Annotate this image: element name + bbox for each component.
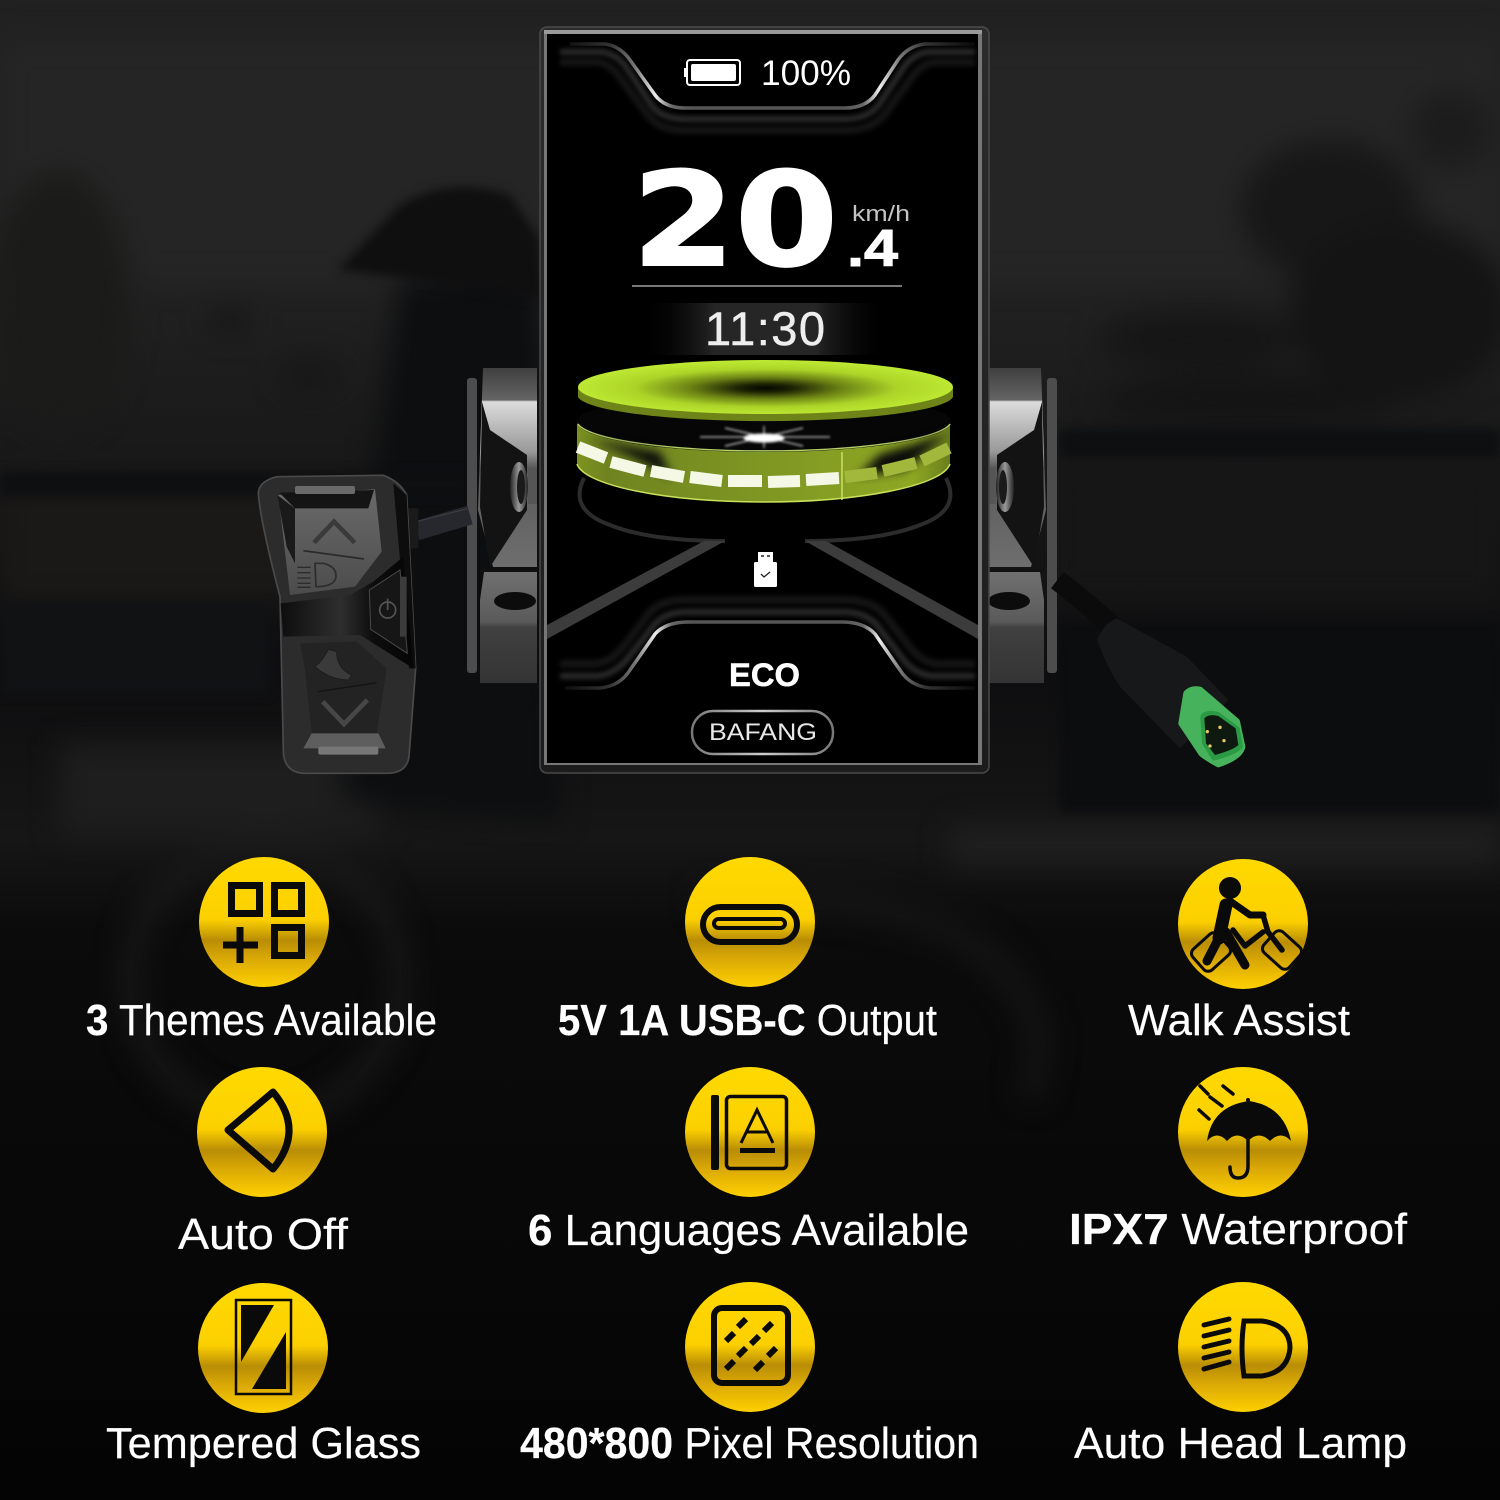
icon: pixel screen: [714, 1308, 788, 1383]
icon: dictionary: [711, 1095, 786, 1170]
feature: resolution: [520, 1282, 979, 1468]
screen: [547, 34, 978, 763]
feature: auto off: [178, 1067, 349, 1259]
clock band: 11:30: [705, 302, 825, 355]
top notch battery bar: [560, 44, 975, 130]
feature: waterproof: [1069, 1067, 1408, 1254]
left mounting bracket: [467, 368, 537, 683]
label: Tempered Glass: [106, 1419, 421, 1468]
label: Auto Head Lamp: [1074, 1419, 1407, 1468]
handlebar remote with cable: [258, 475, 470, 773]
feature: walk assist: [1128, 859, 1350, 1045]
icon: USB-C port: [703, 907, 797, 942]
feature: languages: [528, 1067, 969, 1255]
battery icon: [684, 60, 740, 85]
feature: 3 themes: [86, 857, 437, 1045]
connector cable: [1057, 580, 1242, 764]
label: Auto Off: [178, 1210, 349, 1259]
speed decimal: .4: [847, 220, 898, 278]
sparkle: [700, 426, 830, 448]
icon: theme grid: [223, 886, 302, 963]
icon: umbrella and rain: [1199, 1086, 1291, 1178]
feature: head lamp: [1074, 1282, 1407, 1468]
riding mode: ECO: [729, 657, 800, 693]
head: [1219, 877, 1241, 899]
feature: tempered glass: [106, 1283, 421, 1468]
label: 480*800 Pixel Resolution: [520, 1419, 979, 1468]
speed value: 20: [632, 144, 838, 296]
clock band: [640, 302, 890, 355]
divider: [632, 285, 902, 287]
label: 3 Themes Available: [86, 996, 437, 1045]
label: IPX7 Waterproof: [1069, 1205, 1408, 1254]
bottom notch: [560, 600, 975, 688]
label: 6 Languages Available: [528, 1206, 969, 1255]
USB icon: [754, 552, 777, 587]
icon: person walking bike: [1189, 901, 1304, 974]
right mounting bracket: [987, 368, 1057, 683]
label: Walk Assist: [1128, 996, 1350, 1045]
icon: headlamp: [1204, 1319, 1290, 1376]
brand badge: [692, 711, 833, 754]
icon: glass pane: [236, 1300, 291, 1394]
icon: sector: [228, 1092, 289, 1169]
assist-level gauge disc: [577, 360, 953, 502]
display unit: [540, 27, 989, 773]
speed unit: km/h: [852, 201, 910, 226]
brand badge: BAFANG: [709, 719, 817, 746]
lower disc reflection ring and perspective lines: [547, 478, 978, 639]
label: 5V 1A USB-C Output: [558, 996, 937, 1045]
battery percentage: 100%: [761, 54, 851, 93]
feature: USB-C output: [558, 857, 937, 1045]
